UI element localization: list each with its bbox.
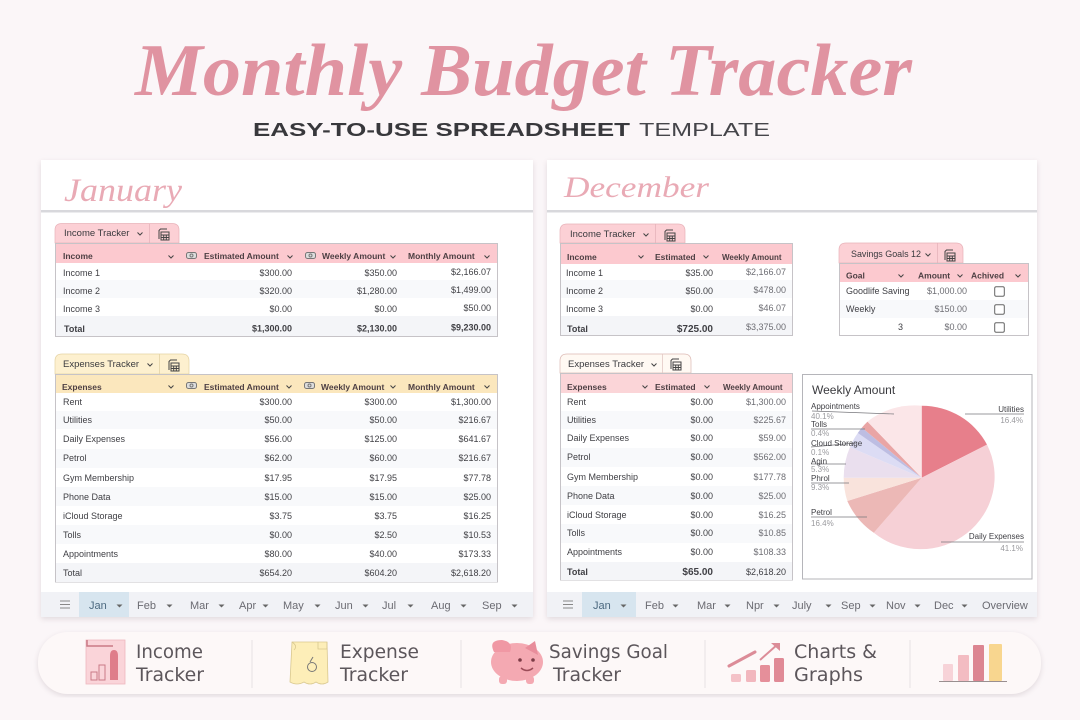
expenses table rows: $108.33 <box>753 547 786 557</box>
income table header: Estimated <box>655 252 696 262</box>
expenses table <box>56 374 498 582</box>
month tabs: January sheet: Jul <box>382 600 396 612</box>
pie labels: Petrol <box>811 508 832 517</box>
expenses table rows: Petrol <box>63 453 87 463</box>
expenses table rows: $10.85 <box>758 528 786 538</box>
income table rows: $478.00 <box>753 285 786 295</box>
pie labels: Cloud Storage <box>811 439 863 448</box>
expenses table rows: $60.00 <box>369 453 397 463</box>
heading: January: January <box>64 173 182 209</box>
expenses table header: Weekly Amount <box>723 383 783 392</box>
expenses table rows: $0.00 <box>690 510 713 520</box>
income table rows: Income 2 <box>63 286 100 296</box>
income table rows: Total <box>567 324 588 334</box>
expenses table rows: $2.50 <box>374 530 397 540</box>
expenses table rows: Tolls <box>567 528 586 538</box>
label: income tracker: Income <box>136 641 203 663</box>
pie labels: 0.1% <box>811 448 829 457</box>
expenses table rows: $10.53 <box>463 530 491 540</box>
expenses table rows: $0.00 <box>690 472 713 482</box>
income table header: Monthly Amount <box>408 251 475 261</box>
income table header: Income <box>567 252 597 262</box>
savings table header: Achived <box>971 270 1004 280</box>
pie labels: 0.4% <box>811 429 829 438</box>
expenses table header: Monthly Amount <box>408 382 475 392</box>
month tabs: January sheet <box>41 592 533 617</box>
income table rows: Income 3 <box>63 304 100 314</box>
expenses table header: Estimated <box>655 382 696 392</box>
income table rows: $350.00 <box>364 268 397 278</box>
month tabs: December sheet: Overview <box>982 600 1028 612</box>
heading: December: December <box>563 171 709 204</box>
income tracker tab <box>560 224 685 243</box>
expenses table rows: $50.00 <box>369 415 397 425</box>
expenses table rows: $641.67 <box>458 434 491 444</box>
savings table rows: Goodlife Saving <box>846 286 910 296</box>
expenses table rows: $17.95 <box>264 473 292 483</box>
expenses table rows: $0.00 <box>690 415 713 425</box>
income table <box>560 244 792 336</box>
income tracker tab: Income Tracker <box>570 229 635 240</box>
expenses table rows: Gym Membership <box>63 473 134 483</box>
month tabs: December sheet: Npr <box>746 600 764 612</box>
expenses table rows: $17.95 <box>369 473 397 483</box>
expenses table rows: $0.00 <box>269 530 292 540</box>
expenses table rows: $62.00 <box>264 453 292 463</box>
pie chart: weekly amount <box>802 374 1032 579</box>
expenses tracker tab <box>55 354 189 374</box>
feature bar <box>38 632 1041 694</box>
title: Monthly Budget Tracker <box>134 30 913 112</box>
expenses table rows: $2,618.20 <box>451 568 491 578</box>
income table rows <box>63 267 491 334</box>
expenses table rows: Gym Membership <box>567 472 638 482</box>
expenses table rows: Daily Expenses <box>567 433 630 443</box>
savings table header: Amount <box>918 270 950 280</box>
income table rows: Income 3 <box>566 304 603 314</box>
expenses table header: Estimated Amount <box>204 382 279 392</box>
income table rows: $0.00 <box>374 304 397 314</box>
expenses table rows: $177.78 <box>753 472 786 482</box>
expenses table rows: Total <box>567 567 588 577</box>
expenses table rows: Rent <box>567 397 587 407</box>
income table header <box>567 252 782 262</box>
income table header: Weekly Amount <box>322 251 385 261</box>
savings table rows: $0.00 <box>944 322 967 332</box>
income table rows <box>566 267 786 335</box>
expenses table rows: $3.75 <box>374 511 397 521</box>
pie labels: Appointments <box>811 402 860 411</box>
income table <box>56 244 498 336</box>
income table rows: $46.07 <box>758 303 786 313</box>
month tabs: January sheet: Sep <box>482 600 502 612</box>
panel: January <box>41 160 533 617</box>
expenses table rows: Appointments <box>63 549 119 559</box>
expenses table header: Expenses <box>62 382 102 392</box>
subtitle <box>253 120 770 140</box>
expenses table rows: $300.00 <box>259 397 292 407</box>
income table header: Weekly Amount <box>722 253 782 262</box>
pie labels: Agin <box>811 457 827 466</box>
icon: expense receipt <box>290 642 328 684</box>
label: charts and graphs: Graphs <box>794 664 863 686</box>
expenses table rows: iCloud Storage <box>63 511 123 521</box>
label: charts and graphs: Charts & <box>794 641 877 663</box>
income table rows: $50.00 <box>463 303 491 313</box>
income table rows: $3,375.00 <box>746 322 786 332</box>
expenses table rows: $56.00 <box>264 434 292 444</box>
income table header: Estimated Amount <box>204 251 279 261</box>
expenses table rows: $80.00 <box>264 549 292 559</box>
month tabs: January sheet: Aug <box>431 600 451 612</box>
expenses table rows: $15.00 <box>264 492 292 502</box>
income table header <box>63 251 490 261</box>
expenses table rows: Petrol <box>567 452 591 462</box>
expenses table rows: Appointments <box>567 547 623 557</box>
pie labels: 5.3% <box>811 465 829 474</box>
expenses table rows: iCloud Storage <box>567 510 627 520</box>
expenses table rows: $50.00 <box>264 415 292 425</box>
expenses table rows: $0.00 <box>690 491 713 501</box>
label: savings goal tracker: Savings Goal <box>549 641 668 663</box>
month tabs: December sheet: Nov <box>886 600 906 612</box>
subtitle: EASY-TO-USE SPREADSHEET <box>253 120 630 140</box>
expenses table rows: $1,300.00 <box>451 397 491 407</box>
month tabs: December sheet: Feb <box>645 600 664 612</box>
savings table rows <box>846 286 1004 332</box>
expenses table rows: $654.20 <box>259 568 292 578</box>
label: charts and graphs <box>794 641 877 686</box>
pie labels <box>811 402 1024 553</box>
income table rows: Total <box>64 324 85 334</box>
expenses table rows: $40.00 <box>369 549 397 559</box>
month tabs: December sheet: July <box>792 600 812 612</box>
pie slices <box>844 405 995 549</box>
income table rows: $725.00 <box>677 324 713 335</box>
expenses tracker tab: Expenses Tracker <box>568 359 644 370</box>
month tabs: January sheet: Feb <box>137 600 156 612</box>
icon: bar chart <box>939 644 1007 682</box>
income tracker tab <box>55 224 179 243</box>
pie labels: 40.1% <box>811 412 834 421</box>
expenses tracker tab <box>560 354 691 373</box>
expenses table rows: Phone Data <box>567 491 615 501</box>
expenses table rows: $216.67 <box>458 453 491 463</box>
expenses tracker tab: Expenses Tracker <box>63 359 139 370</box>
savings table header <box>846 270 1020 280</box>
month tabs: December sheet: Mar <box>697 600 716 612</box>
month tabs: December sheet <box>547 592 1037 617</box>
expenses table rows: $16.25 <box>758 510 786 520</box>
savings table rows: 3 <box>898 322 903 332</box>
income table rows: $9,230.00 <box>451 322 491 332</box>
expenses table rows: $65.00 <box>682 567 713 578</box>
pie leader lines <box>811 411 1024 542</box>
expenses table rows: Total <box>63 568 82 578</box>
label: income tracker: Tracker <box>135 664 204 686</box>
income table rows: $2,166.07 <box>451 267 491 277</box>
icon: income tracker <box>86 640 125 684</box>
income table rows: $1,499.00 <box>451 285 491 295</box>
icon: piggy bank <box>491 640 543 684</box>
savings goals tab: Savings Goals 12 <box>851 249 921 260</box>
expenses table rows: $125.00 <box>364 434 397 444</box>
month tabs: January sheet: Mar <box>190 600 209 612</box>
label: expense tracker: Tracker <box>339 664 408 686</box>
expenses table rows <box>63 397 491 578</box>
pie labels: 41.1% <box>1000 544 1023 553</box>
savings goals table <box>840 264 1028 336</box>
label: savings goal tracker <box>549 641 668 686</box>
expenses table rows: $3.75 <box>269 511 292 521</box>
pie labels: 16.4% <box>811 519 834 528</box>
expenses table rows: Phone Data <box>63 492 111 502</box>
savings table rows: $150.00 <box>934 304 967 314</box>
income table rows: $2,130.00 <box>357 324 397 334</box>
expenses table rows: $562.00 <box>753 452 786 462</box>
expenses table rows: Utilities <box>567 415 597 425</box>
month tabs: January sheet: Jan <box>89 600 107 612</box>
income table rows: $2,166.07 <box>746 267 786 277</box>
income table rows: $320.00 <box>259 286 292 296</box>
income table rows: Income 1 <box>63 268 100 278</box>
expenses table rows: $0.00 <box>690 528 713 538</box>
expenses table rows: $15.00 <box>369 492 397 502</box>
expenses table rows: $2,618.20 <box>746 567 786 577</box>
expenses table rows: $25.00 <box>758 491 786 501</box>
income table header: Income <box>63 251 93 261</box>
savings table rows: $1,000.00 <box>927 286 967 296</box>
month tabs: December sheet: Sep <box>841 600 861 612</box>
label: savings goal tracker: Tracker <box>552 664 621 686</box>
expenses table rows: $0.00 <box>690 452 713 462</box>
expenses table rows: $25.00 <box>463 492 491 502</box>
expenses table rows: $59.00 <box>758 433 786 443</box>
expenses table rows: $300.00 <box>364 397 397 407</box>
month tabs: January sheet: Apr <box>239 600 256 612</box>
savings table header: Goal <box>846 270 865 280</box>
month tabs: January sheet: Jun <box>335 600 353 612</box>
pie labels: 16.4% <box>1000 416 1023 425</box>
pie labels: Phrol <box>811 474 830 483</box>
pie labels: Daily Expenses <box>969 532 1024 541</box>
label: income tracker <box>135 641 204 686</box>
expenses table rows: $173.33 <box>458 549 491 559</box>
income table rows: $0.00 <box>690 304 713 314</box>
expenses table rows: $216.67 <box>458 415 491 425</box>
income table rows: $300.00 <box>259 268 292 278</box>
expenses table rows: Daily Expenses <box>63 434 126 444</box>
income table rows: $0.00 <box>269 304 292 314</box>
expenses table rows: $0.00 <box>690 433 713 443</box>
income table rows: $1,300.00 <box>252 324 292 334</box>
expenses table rows: Tolls <box>63 530 82 540</box>
expenses table rows: $604.20 <box>364 568 397 578</box>
chart title: Weekly Amount <box>812 383 896 397</box>
pie labels: Utilities <box>998 405 1024 414</box>
expenses table header <box>62 382 490 392</box>
label: expense tracker <box>339 641 419 686</box>
income table rows: $50.00 <box>685 286 713 296</box>
expenses table header <box>567 382 783 392</box>
income tracker tab: Income Tracker <box>64 228 129 239</box>
pie labels: Tolls <box>811 420 827 429</box>
expenses table rows: Rent <box>63 397 83 407</box>
income table rows: $1,280.00 <box>357 286 397 296</box>
expenses table rows <box>567 397 786 578</box>
expenses table header: Expenses <box>567 382 607 392</box>
expenses table rows: $77.78 <box>463 473 491 483</box>
label: expense tracker: Expense <box>340 641 419 663</box>
income table rows: Income 1 <box>566 268 603 278</box>
month tabs: December sheet: Dec <box>934 600 954 612</box>
savings goals tab <box>839 243 963 263</box>
expenses table rows: $1,300.00 <box>746 397 786 407</box>
pie labels: 9.3% <box>811 483 829 492</box>
expenses table rows: $0.00 <box>690 547 713 557</box>
savings table rows: Weekly <box>846 304 876 314</box>
icon: rising chart <box>729 643 784 682</box>
month tabs: January sheet: May <box>283 600 304 612</box>
expenses table header: Weekly Amount <box>321 382 384 392</box>
expenses table <box>560 374 792 580</box>
month tabs: December sheet: Jan <box>593 600 611 612</box>
panel: December <box>547 160 1037 617</box>
expenses table rows: $0.00 <box>690 397 713 407</box>
expenses table rows: $16.25 <box>463 511 491 521</box>
income table rows: $35.00 <box>685 268 713 278</box>
expenses table rows: Utilities <box>63 415 93 425</box>
subtitle: TEMPLATE <box>639 120 770 140</box>
expenses table rows: $225.67 <box>753 415 786 425</box>
income table rows: Income 2 <box>566 286 603 296</box>
